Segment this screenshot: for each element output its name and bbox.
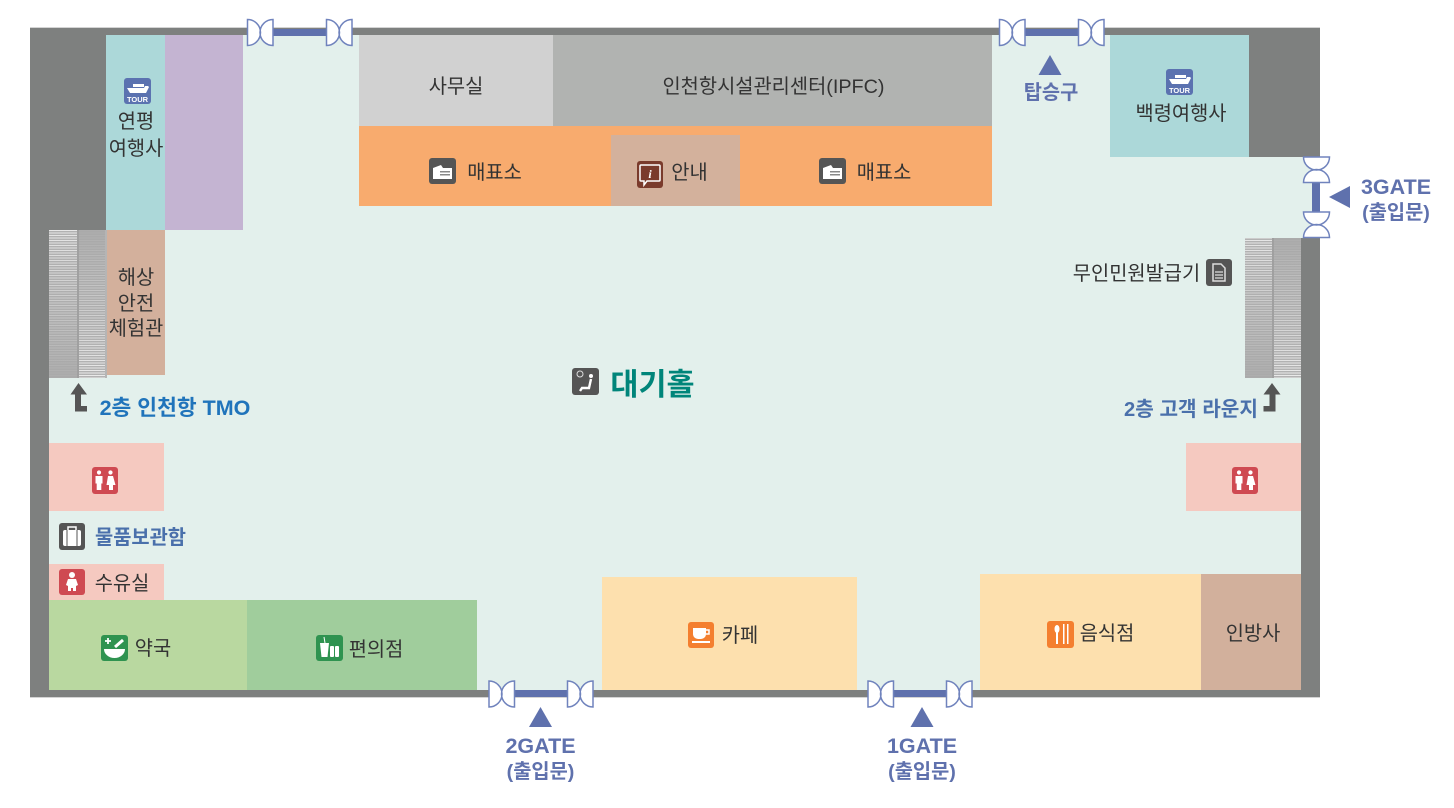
- gate: boarding: [1000, 20, 1104, 46]
- arrow: to second floor left: [70, 383, 87, 412]
- panel: Inbangsa: [1201, 574, 1301, 690]
- heading: waiting hall: [572, 368, 695, 402]
- icon: information: i: [648, 167, 652, 181]
- icon: tour ship: TOUR: [1169, 86, 1191, 95]
- panel: cafe: 카페: [722, 625, 758, 647]
- panel: restroom right: [1186, 443, 1301, 511]
- icon: mortar: [101, 635, 128, 661]
- arrow: boarding: [1038, 55, 1062, 75]
- icon: baby: [59, 569, 85, 595]
- label: 3GATE: [1361, 175, 1431, 224]
- panel: Baengnyeong travel agency: 백령여행사: [1136, 103, 1226, 125]
- left escalators: [49, 230, 107, 378]
- panel: ticket office band: 매표소: [857, 162, 911, 184]
- panel: pharmacy: 약국: [135, 638, 171, 660]
- label: 1GATE: [887, 734, 957, 783]
- icon: restroom: [92, 467, 118, 494]
- arrow: 3GATE: [1329, 186, 1350, 208]
- panel: office: 사무실: [429, 76, 483, 98]
- panel: convenience store: [247, 600, 477, 690]
- icon: drink and bottles: [316, 635, 343, 661]
- panel: information desk: [611, 135, 740, 206]
- panel: Yeonpyeong travel agency: 연평: [118, 111, 154, 133]
- label: 2GATE: 2GATE: [505, 734, 576, 758]
- label: 3GATE: 3GATE: [1361, 175, 1431, 199]
- luggage storage: [59, 523, 186, 550]
- gate: north west: [248, 20, 352, 46]
- label: kiosk: [1073, 259, 1232, 286]
- gate: 2GATE doors: [489, 681, 593, 707]
- icon: waiting seat: [572, 368, 599, 395]
- panel: nursing room: [49, 564, 164, 600]
- label: 2GATE: [505, 734, 576, 783]
- panel: office: [359, 35, 553, 126]
- label: 2GATE: (출입문): [507, 761, 574, 783]
- label: 2nd floor customer lounge: 2층 고객 라운지: [1124, 398, 1258, 421]
- panel: maritime safety hall: 안전: [118, 293, 154, 315]
- icon: tour ship: TOUR: [127, 95, 149, 104]
- icon: tour ship: [124, 78, 151, 104]
- arrow: 1GATE: [910, 707, 934, 727]
- panel: restaurant: [980, 574, 1201, 690]
- icon: coffee cup: [688, 622, 714, 648]
- label: 2nd floor Incheon port TMO: 2층 인천항 TMO: [100, 396, 250, 420]
- panel: Yeonpyeong travel agency: 여행사: [109, 138, 163, 160]
- icon: restroom: [1232, 467, 1258, 494]
- panel: cafe: [602, 577, 857, 690]
- icon: luggage: [59, 523, 85, 550]
- panel: information desk: 안내: [671, 162, 708, 184]
- panel: ticket office band: 매표소: [467, 162, 522, 184]
- panel: pharmacy: [49, 600, 247, 690]
- waiting hall floor: [49, 35, 1313, 690]
- gate: 3GATE doors: [1304, 157, 1330, 238]
- label: 1GATE: 1GATE: [887, 734, 957, 758]
- arrow: 2GATE: [529, 707, 552, 727]
- gate: 1GATE doors: [868, 681, 972, 707]
- panel: Baengnyeong travel agency: [1110, 35, 1249, 157]
- panel: ticket office band: [359, 126, 992, 206]
- arrow: to second floor right: [1264, 383, 1280, 412]
- panel: nursing room: 수유실: [95, 573, 149, 595]
- luggage storage: 물품보관함: [95, 527, 186, 549]
- right escalators: [1245, 238, 1301, 378]
- label: kiosk: 무인민원발급기: [1073, 263, 1200, 285]
- panel: Inbangsa: 인방사: [1226, 623, 1280, 645]
- panel: IPFC: 인천항시설관리센터(IPFC): [662, 76, 885, 98]
- icon: ticket left: [429, 158, 456, 184]
- panel: maritime safety hall: 체험관: [109, 318, 163, 340]
- label: boarding gate: 탑승구: [1024, 82, 1078, 104]
- panel: maritime safety hall: 해상: [118, 267, 154, 289]
- panel: IPFC: [553, 35, 992, 126]
- panel: restaurant: 음식점: [1080, 623, 1134, 645]
- panel: Yeonpyeong travel agency: [106, 35, 165, 230]
- label: 1GATE: (출입문): [888, 761, 956, 783]
- icon: document: [1206, 259, 1232, 286]
- label: 3GATE: (출입문): [1362, 202, 1430, 224]
- heading: waiting hall: 대기홀: [610, 368, 695, 402]
- panel: restroom left: [49, 443, 164, 511]
- panel: convenience store: 편의점: [349, 639, 403, 661]
- icon: ticket right: [819, 158, 846, 184]
- building walls: [30, 27, 1332, 698]
- panel: purple room: [165, 35, 243, 230]
- panel: maritime safety hall: [106, 230, 165, 375]
- icon: spoon and chopsticks: [1047, 621, 1074, 648]
